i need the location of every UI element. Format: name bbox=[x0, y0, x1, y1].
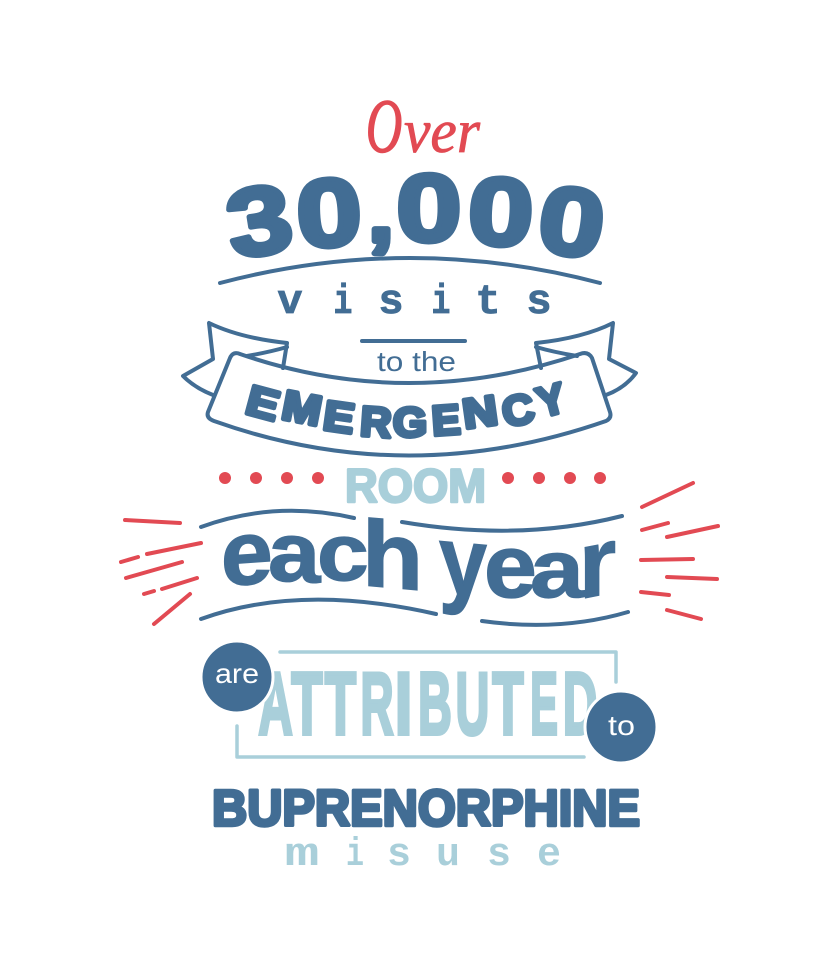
badge: are: are bbox=[215, 658, 259, 689]
word: ATTRIBUTED: T bbox=[325, 656, 356, 754]
word: misuse: s bbox=[487, 833, 511, 878]
number: 30,000: , bbox=[369, 169, 393, 258]
badge: to bbox=[585, 691, 657, 763]
banner text: EMERGENCY: Y bbox=[531, 374, 571, 426]
number: 30,000 bbox=[219, 154, 611, 280]
heading: Over: O bbox=[366, 85, 402, 169]
badge: are bbox=[201, 641, 273, 713]
heading: each year: c bbox=[317, 508, 369, 598]
word: visits: v bbox=[277, 278, 303, 326]
rule above to the bbox=[362, 339, 465, 343]
heading: each year: r bbox=[579, 507, 616, 620]
red burst left bbox=[121, 520, 201, 624]
banner text: EMERGENCY: G bbox=[393, 399, 427, 446]
ribbon banner bbox=[183, 323, 636, 456]
banner text: EMERGENCY: C bbox=[498, 385, 538, 437]
bracket frame bbox=[237, 652, 616, 757]
banner text: EMERGENCY: E bbox=[241, 376, 285, 430]
heading: each year: e bbox=[221, 500, 273, 606]
word: misuse: s bbox=[387, 833, 411, 878]
word: visits bbox=[277, 278, 552, 327]
word: ATTRIBUTED: D bbox=[563, 654, 597, 753]
heading: Over: ver bbox=[404, 98, 481, 166]
curved rule under number bbox=[220, 258, 600, 283]
badge: to: to bbox=[608, 710, 635, 741]
word: misuse: e bbox=[537, 833, 561, 878]
heading: each year bbox=[221, 500, 616, 620]
number: 30,000: 0 bbox=[466, 156, 536, 267]
word: visits: s bbox=[526, 278, 552, 326]
banner text: EMERGENCY: R bbox=[359, 398, 393, 447]
word: BUPRENORPHINE: BUPRENORPHINE bbox=[212, 780, 640, 836]
banner text: EMERGENCY bbox=[241, 374, 571, 447]
word: ATTRIBUTED: T bbox=[291, 656, 323, 754]
heading: Over bbox=[366, 85, 481, 169]
heading: each year: y bbox=[439, 504, 487, 618]
red dots left bbox=[219, 472, 324, 484]
red burst right bbox=[641, 483, 718, 619]
heading: each year: a bbox=[530, 524, 585, 615]
word: ATTRIBUTED: A bbox=[258, 654, 293, 753]
banner text: EMERGENCY: E bbox=[320, 392, 357, 443]
heading: each year: h bbox=[362, 500, 423, 611]
number: 30,000: 3 bbox=[219, 164, 299, 279]
word: visits: s bbox=[378, 278, 404, 326]
word: ROOM: ROOM bbox=[345, 459, 486, 512]
banner text: EMERGENCY: N bbox=[459, 386, 501, 438]
red dots right bbox=[502, 472, 606, 484]
word: visits: t bbox=[475, 278, 501, 326]
word: ATTRIBUTED: I bbox=[395, 656, 412, 754]
number: 30,000: 0 bbox=[532, 164, 611, 280]
word: ATTRIBUTED: U bbox=[456, 654, 489, 753]
word: ATTRIBUTED: T bbox=[492, 656, 524, 754]
word: ATTRIBUTED: E bbox=[530, 655, 558, 753]
word: ATTRIBUTED: R bbox=[360, 655, 394, 753]
word: ATTRIBUTED bbox=[258, 654, 597, 754]
banner text: EMERGENCY: E bbox=[430, 396, 462, 444]
word: misuse bbox=[285, 832, 561, 878]
word: misuse: u bbox=[436, 833, 460, 878]
heading: each year: e bbox=[484, 517, 537, 616]
word: misuse: i bbox=[346, 832, 364, 877]
text: to the: to the bbox=[377, 346, 456, 377]
word: misuse: m bbox=[285, 832, 319, 877]
word: ATTRIBUTED: B bbox=[418, 654, 452, 753]
heading: each year: a bbox=[268, 504, 322, 601]
number: 30,000: 0 bbox=[396, 154, 462, 262]
number: 30,000: 0 bbox=[294, 157, 364, 268]
wavy lines around each year bbox=[201, 511, 628, 625]
banner text: EMERGENCY: M bbox=[278, 382, 325, 435]
word: visits: i bbox=[334, 279, 352, 327]
word: visits: i bbox=[432, 279, 450, 327]
